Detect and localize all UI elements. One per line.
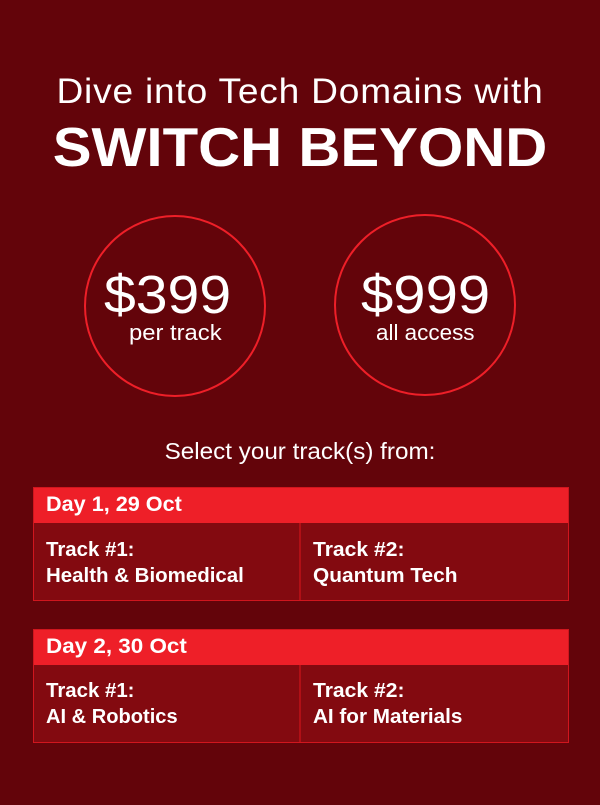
title: Dive into Tech Domains with: [56, 72, 544, 111]
day 2 track 2: Track #2:: [313, 680, 405, 702]
price circle: all access: [334, 214, 516, 396]
day 2 track 1: [46, 680, 178, 728]
price label: all access: all access: [376, 320, 475, 345]
day 1 track 2: Track #2:: [313, 539, 405, 561]
day 2 track 1: Track #1:: [46, 680, 134, 702]
price circle: per track: [84, 215, 266, 397]
day 2 track 1: AI & Robotics: [46, 706, 178, 728]
day 1 header: Day 1, 29 Oct: [46, 493, 182, 516]
price: $999: $999: [361, 265, 490, 325]
panel: day 2 schedule: [33, 629, 569, 743]
day 2 header: [34, 630, 568, 665]
day 1 track 1: Track #1:: [46, 539, 134, 561]
day 1 track 2: [313, 539, 457, 587]
day 2 track 2: [313, 680, 462, 728]
day 1 header: [34, 488, 568, 523]
heading: Switch Beyond: SWITCH BEYOND: [53, 116, 547, 178]
price: $399: $399: [104, 265, 231, 325]
price label: per track: per track: [129, 320, 222, 345]
day 2 track 2: AI for Materials: [313, 706, 462, 728]
day 1 track 1: Health & Biomedical: [46, 565, 244, 587]
section prompt: Select your track(s) from:: [165, 438, 435, 464]
day 1 track 1: [46, 539, 244, 587]
day 1 track 2: Quantum Tech: [313, 565, 457, 587]
panel: day 1 schedule: [33, 487, 569, 601]
day 2 header: Day 2, 30 Oct: [46, 635, 187, 658]
